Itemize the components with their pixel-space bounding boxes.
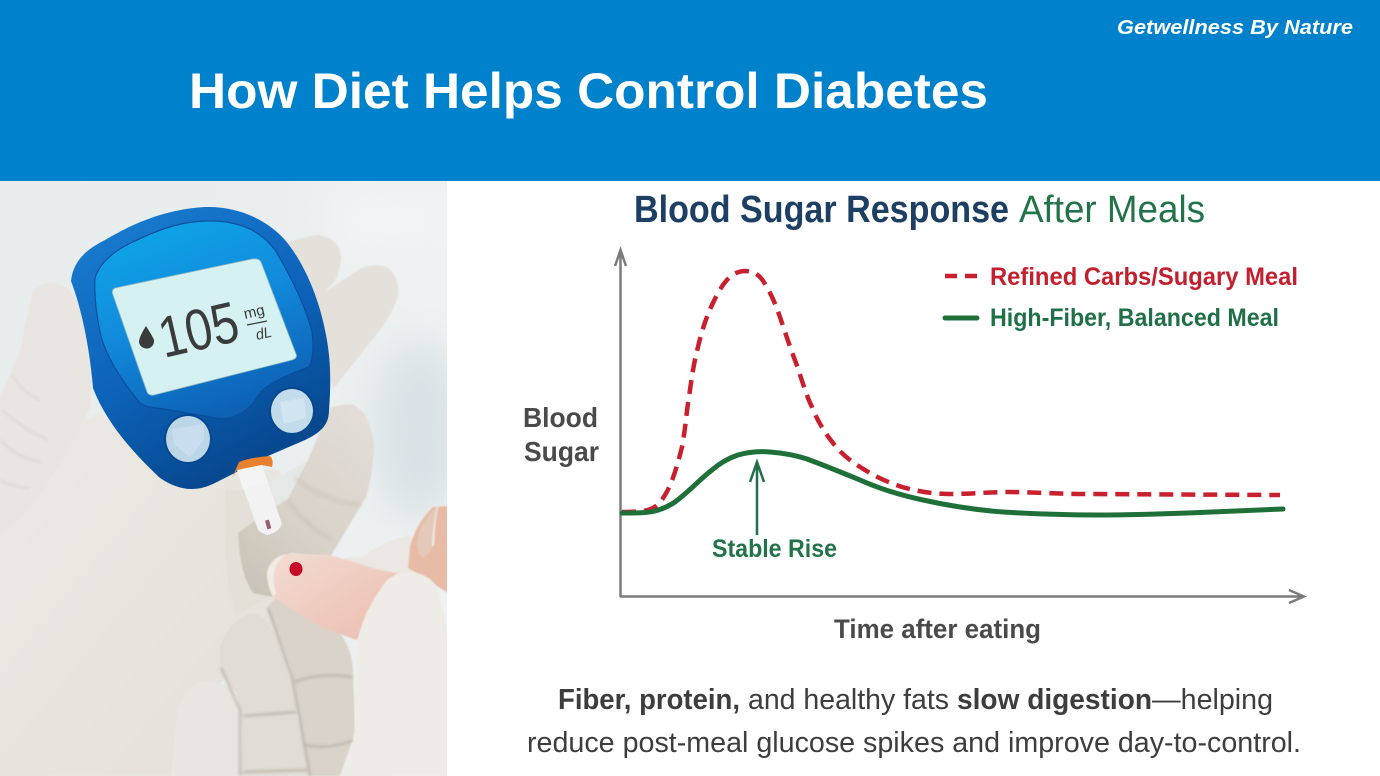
- stable rise arrow: [750, 462, 764, 535]
- test strip: [244, 483, 282, 535]
- icon: drop: [139, 326, 154, 349]
- x axis: [620, 590, 1304, 603]
- front glove finger: [340, 572, 448, 776]
- stable rise label: Stable Rise: [712, 535, 837, 563]
- chart title: After Meals: [1019, 189, 1205, 231]
- fingertip: [267, 554, 397, 640]
- summary text: —helping: [1152, 684, 1273, 716]
- meter reading: [139, 302, 272, 358]
- bare fingers: [267, 506, 448, 640]
- high-fiber curve: [622, 452, 1283, 515]
- finger behind meter, second: [315, 265, 398, 389]
- finger behind meter, top: [288, 235, 341, 300]
- glove behind fingertip: [346, 536, 412, 574]
- y axis: [615, 250, 626, 597]
- finger one: [226, 646, 308, 776]
- legend: High-Fiber, Balanced Meal: [990, 304, 1279, 332]
- meter reading: 105: [152, 289, 245, 371]
- fingernail: [417, 507, 437, 557]
- palm: [0, 413, 300, 776]
- meter reading: dL: [254, 324, 273, 344]
- gloved holding hand: [0, 235, 398, 776]
- summary text: Fiber, protein,: [558, 684, 740, 716]
- strip port: [232, 456, 273, 478]
- chart title: Blood Sugar Response: [634, 189, 1009, 231]
- legend: [945, 263, 1298, 332]
- meter button left: [164, 414, 212, 464]
- refined carbs curve: [622, 271, 1280, 512]
- supporting finger: [238, 404, 374, 597]
- summary text: reduce post-meal glucose spikes and improve day-to-control.: [527, 727, 1301, 759]
- line chart: [523, 250, 1304, 644]
- panel: photo of glucose meter in gloved hands: [0, 181, 465, 776]
- summary text: [527, 684, 1301, 759]
- line chart: Sugar: [524, 436, 599, 467]
- palm fold near strip: [283, 499, 286, 502]
- summary text: and healthy fats: [748, 684, 949, 716]
- meter button right: [269, 387, 312, 422]
- title: How Diet Helps Control Diabetes: [189, 63, 988, 119]
- x axis label: Time after eating: [834, 614, 1041, 644]
- pinching finger with nail: [408, 506, 448, 593]
- legend: Refined Carbs/Sugary Meal: [990, 263, 1298, 291]
- meter face: [95, 221, 313, 419]
- summary text: slow digestion: [957, 684, 1152, 716]
- brand label: Getwellness By Nature: [1117, 17, 1353, 39]
- gloved fingers, bottom: [173, 597, 355, 776]
- header band: [0, 0, 1380, 181]
- blood drop: [290, 562, 302, 576]
- gap behind strip: [268, 477, 286, 505]
- finger three: [173, 682, 243, 776]
- meter screen: [112, 259, 296, 395]
- y axis label: Blood: [523, 402, 598, 433]
- icon: glucose meter: [71, 207, 330, 489]
- meter reading: mg: [242, 302, 266, 323]
- thumb: [0, 283, 93, 535]
- finger two: [267, 597, 355, 776]
